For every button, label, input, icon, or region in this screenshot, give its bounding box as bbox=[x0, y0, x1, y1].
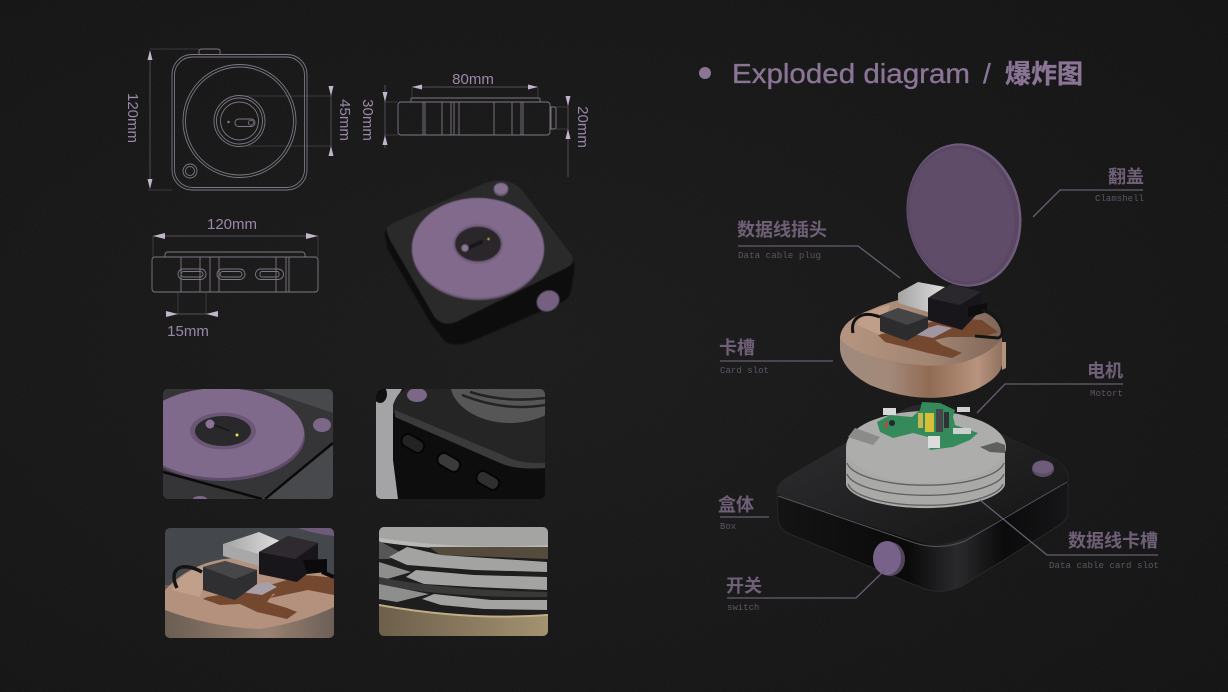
heading bbox=[699, 58, 1083, 89]
callout: motor bbox=[977, 361, 1123, 413]
callout: switch bbox=[726, 570, 885, 613]
callout: data cable plug bbox=[737, 220, 900, 278]
copper base bbox=[165, 585, 334, 638]
callout: clamshell: 翻盖 bbox=[1108, 166, 1144, 187]
callout: data cable plug: 数据线插头 bbox=[737, 220, 827, 240]
black plug small bbox=[203, 561, 257, 600]
button on box bbox=[1032, 461, 1054, 477]
dimension: 30mm: 30mm bbox=[359, 99, 376, 141]
slots bbox=[848, 428, 880, 445]
thumbnail: plug close-up bbox=[165, 528, 334, 638]
USB connector bbox=[898, 282, 945, 312]
part: card slot copper puck bbox=[840, 296, 1006, 398]
dimension: 120mm width: 120mm bbox=[207, 216, 257, 233]
chip bbox=[913, 325, 952, 338]
callout: box bbox=[718, 494, 769, 532]
top button bbox=[494, 184, 508, 196]
callout: clamshell: Clamshell bbox=[1095, 194, 1144, 204]
heading text: Exploded diagram bbox=[732, 58, 970, 89]
callout: motor: 电机 bbox=[1087, 361, 1123, 381]
dimension: 80mm: 80mm bbox=[452, 71, 494, 88]
icon: front view outline bbox=[152, 252, 318, 292]
callout: card slot: Card slot bbox=[720, 366, 769, 376]
callout: switch: 开关 bbox=[726, 576, 762, 596]
dimension: 15mm: 15mm bbox=[167, 323, 209, 340]
USB plug bbox=[223, 532, 280, 556]
thumbnail: top surface close-up bbox=[163, 389, 333, 499]
thumbnail: ports close-up bbox=[376, 389, 545, 499]
callout: data cable plug: Data cable plug bbox=[738, 251, 821, 261]
callout: data cable card slot: 数据线卡槽 bbox=[1068, 531, 1158, 551]
part: motor circuit board bbox=[877, 402, 978, 450]
callout: card slot: 卡槽 bbox=[719, 338, 755, 358]
switch bbox=[875, 542, 905, 576]
callout: card slot bbox=[719, 338, 833, 376]
callout: box: Box bbox=[720, 522, 736, 532]
icon: top view outline bbox=[172, 49, 307, 190]
bullet bbox=[699, 67, 711, 79]
black plug large bbox=[259, 536, 318, 582]
drawing: top view with dimensions bbox=[124, 49, 353, 190]
chip bbox=[242, 582, 277, 595]
large black plug bbox=[928, 284, 981, 330]
dimension: 45mm: 45mm bbox=[336, 99, 353, 141]
heading text: 爆炸图 bbox=[1005, 59, 1083, 89]
thumbnail: layered slots close-up bbox=[379, 527, 548, 636]
dimension: 120mm height: 120mm bbox=[124, 93, 141, 143]
stacked cylinder bbox=[451, 389, 545, 423]
part: clamshell lid bbox=[895, 134, 1033, 296]
drawing: front view with dimensions bbox=[152, 216, 318, 340]
product render: closed device bbox=[385, 180, 574, 345]
callout: switch: switch bbox=[727, 603, 759, 613]
side button bbox=[533, 287, 563, 315]
callout: box: 盒体 bbox=[718, 494, 754, 515]
icon: side view outline bbox=[398, 98, 556, 135]
dimension: 20mm: 20mm bbox=[574, 106, 591, 148]
callout: motor: Motort bbox=[1090, 389, 1123, 399]
drawing: side view with dimensions bbox=[359, 71, 591, 177]
part: box bbox=[777, 404, 1068, 591]
part: data cable card slot stack bbox=[846, 411, 1006, 508]
cavity bbox=[878, 318, 998, 358]
exploded diagram bbox=[777, 134, 1068, 591]
callout: data cable card slot: Data cable card slot bbox=[1049, 561, 1159, 571]
small black plug bbox=[880, 308, 928, 341]
callout: data cable card slot bbox=[980, 500, 1159, 571]
purple ring bbox=[163, 426, 305, 481]
heading text: / bbox=[983, 58, 991, 89]
purple disc bbox=[412, 200, 544, 300]
callout: clamshell bbox=[1033, 166, 1144, 217]
part: data cable plug bbox=[853, 282, 1002, 341]
